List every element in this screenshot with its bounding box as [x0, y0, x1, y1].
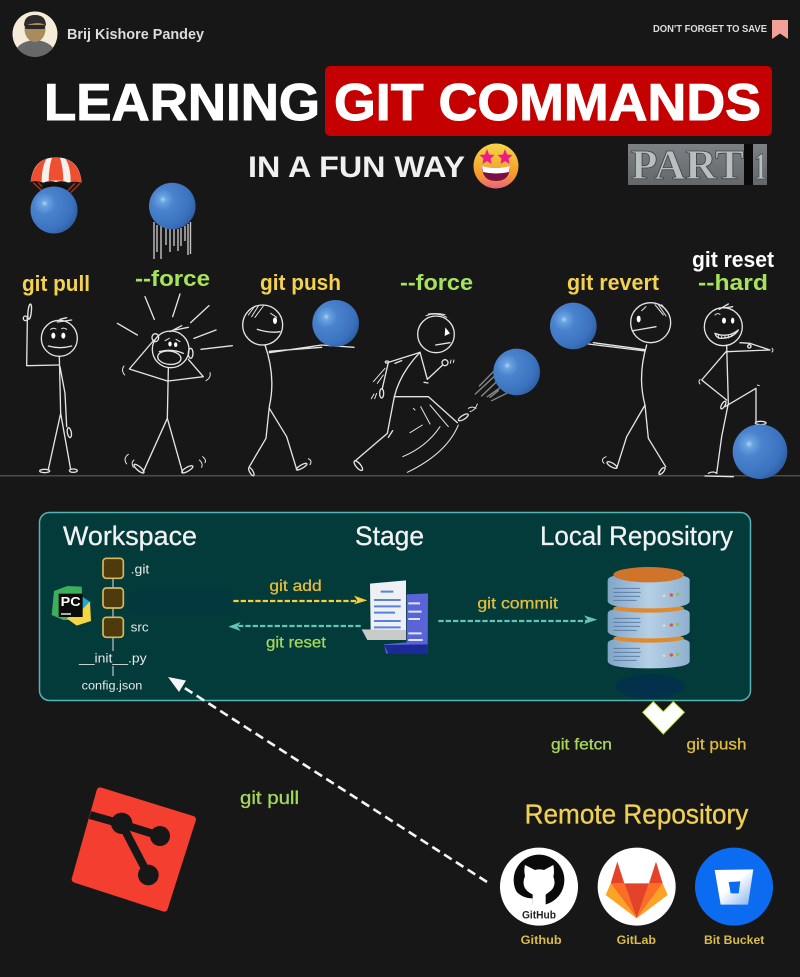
icon: ball: [550, 303, 597, 349]
author header: [12, 12, 205, 57]
title highlight box: [325, 66, 772, 136]
stick figure: git revert with ball: [550, 303, 671, 475]
icon: bookmark: [772, 20, 788, 39]
icon: star-eyes emoji: [474, 144, 518, 188]
icon: pycharm: [52, 586, 91, 626]
icon: git logo: [75, 791, 193, 908]
stick figure: git push with ball: [243, 300, 359, 477]
arrow: git reset: git reset: [266, 635, 327, 652]
label: git reset hard: [692, 247, 775, 295]
arrow: git add: [233, 578, 367, 604]
panel: git workflow: [40, 512, 750, 700]
arrow: git pull to workspace: [168, 677, 487, 882]
stick figure: git pull: [23, 304, 77, 473]
label: git revert: git revert: [567, 270, 660, 295]
ball motion lines: [475, 372, 507, 401]
file tree: .git: [131, 561, 150, 576]
heading: local repository: Local Repository: [540, 521, 733, 551]
ball with parachute: [30, 157, 82, 234]
icon: stage documents: [362, 580, 428, 654]
label: gitlab: GitLab: [617, 933, 656, 947]
arrow: git commit: [438, 595, 597, 624]
title: [44, 66, 772, 136]
icon: ball: [30, 186, 78, 234]
stick figure: force shock: [117, 294, 232, 474]
section: remote repository: [500, 798, 773, 947]
stick figure: git reset hard with ball: [699, 304, 787, 479]
label: git reset hard: git reset: [692, 247, 775, 272]
label: force kick: --force: [400, 270, 473, 295]
subtitle: IN A FUN WAY: [248, 151, 465, 184]
label: git pull: git pull: [22, 271, 90, 296]
faint shadow behind git add: [130, 590, 234, 614]
icon: white chevron: [643, 702, 684, 734]
heading: workspace: Workspace: [63, 521, 197, 551]
heading: stage: Stage: [355, 521, 424, 551]
label: git push: git push: [260, 270, 341, 295]
label: git pull remote: git pull: [240, 787, 299, 808]
author name: Brij Kishore Pandey: [67, 26, 205, 43]
icon: ball: [493, 349, 540, 395]
file tree: __init__.py: [78, 651, 147, 666]
icon: github: [500, 848, 578, 926]
title: learning: LEARNING: [44, 74, 320, 132]
icon: parachute: [31, 157, 82, 193]
label: git push remote: git push: [686, 736, 746, 754]
badge: part 1: PART: [631, 143, 744, 189]
file tree: [78, 558, 150, 692]
arrow: git add: git add: [269, 578, 322, 595]
ground line: [0, 475, 800, 476]
icon: gitlab: [598, 848, 676, 926]
falling ball: [149, 183, 196, 259]
icon: local repository database: [608, 567, 690, 668]
icon: github: GitHub: [522, 910, 556, 922]
icon: pycharm: PC: [61, 594, 81, 609]
save reminder: [653, 20, 788, 39]
arrow: git commit: git commit: [477, 595, 559, 612]
dark shadow below database: [616, 674, 684, 698]
icon: ball: [312, 300, 359, 347]
file tree: config.json: [82, 678, 142, 692]
icon: author avatar: [12, 12, 58, 57]
falling motion lines: [154, 222, 190, 259]
save text: DON'T FORGET TO SAVE: [653, 23, 767, 35]
label: github: Github: [521, 933, 562, 947]
arrow: git reset: [228, 622, 361, 652]
label: git fetch: git fetcn: [551, 736, 612, 754]
icon: bitbucket: [695, 848, 773, 926]
icon: ball: [149, 183, 196, 229]
badge: part 1: 1: [754, 146, 767, 188]
label: force: --force: [135, 266, 210, 291]
title: git commands: GIT COMMANDS: [334, 74, 761, 132]
label: bit bucket: Bit Bucket: [704, 933, 764, 947]
icon: ball: [733, 424, 787, 479]
stick figure: force kick with ball: [353, 313, 540, 472]
heading: remote repository: Remote Repository: [525, 798, 749, 829]
file tree: src: [131, 620, 149, 635]
panel background: [40, 512, 750, 700]
label: git reset hard: --hard: [698, 270, 768, 295]
